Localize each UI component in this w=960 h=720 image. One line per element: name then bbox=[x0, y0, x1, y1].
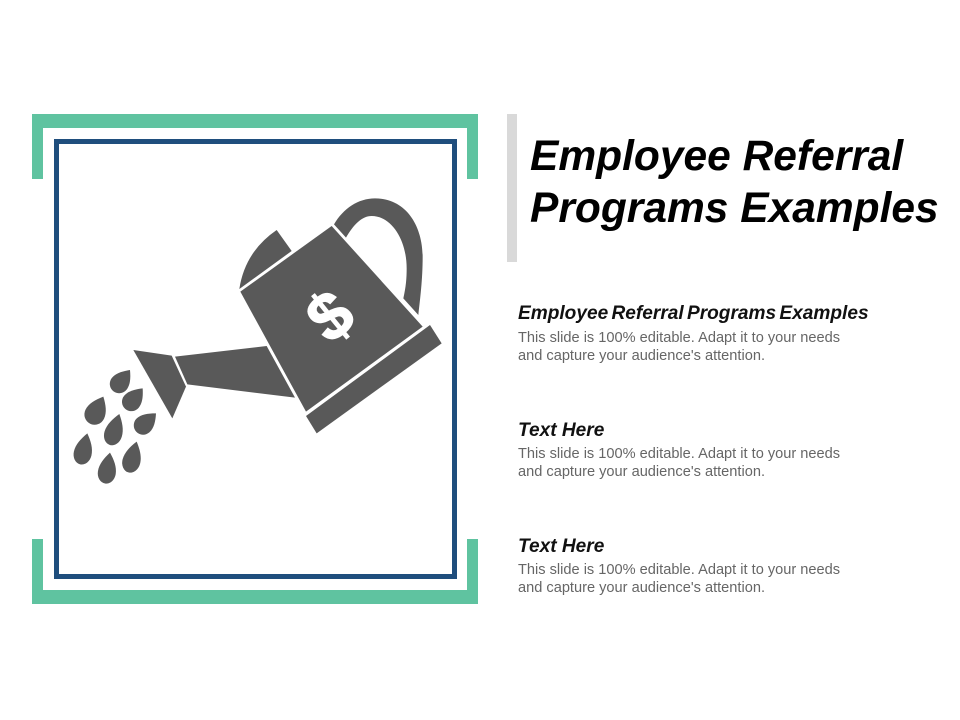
body 1: This slide is 100% editable. Adapt it to your needs bbox=[518, 330, 840, 346]
body 2: This slide is 100% editable. Adapt it to your needs bbox=[518, 446, 840, 462]
heading 1: Employee Referral Programs Examples bbox=[518, 303, 869, 324]
text block 2 bbox=[518, 420, 840, 480]
can lid bbox=[239, 230, 292, 289]
navy frame bbox=[56, 142, 454, 576]
can spout bbox=[175, 346, 295, 398]
title bbox=[530, 133, 939, 232]
title: Employee Referral bbox=[530, 133, 903, 180]
body 3 bbox=[518, 562, 840, 596]
title accent bar bbox=[507, 114, 517, 262]
text block 1 bbox=[518, 303, 869, 364]
spout rose bbox=[133, 350, 186, 418]
text block 3 bbox=[518, 536, 840, 596]
icon: watering can bbox=[71, 198, 442, 485]
title: Programs Examples bbox=[530, 185, 939, 232]
body 3: This slide is 100% editable. Adapt it to your needs bbox=[518, 562, 840, 578]
green corner brackets bbox=[32, 114, 478, 604]
can body bbox=[240, 226, 423, 412]
body 2: and capture your audience's attention. bbox=[518, 464, 765, 480]
can base bbox=[306, 325, 442, 433]
body 1: and capture your audience's attention. bbox=[518, 348, 765, 364]
heading 2: Text Here bbox=[518, 420, 604, 441]
water drops bbox=[71, 364, 162, 485]
heading 3: Text Here bbox=[518, 536, 604, 557]
can handle bbox=[334, 198, 423, 315]
body 1 bbox=[518, 330, 840, 364]
icon: dollar sign: $ bbox=[292, 276, 368, 357]
body 3: and capture your audience's attention. bbox=[518, 580, 765, 596]
body 2 bbox=[518, 446, 840, 480]
